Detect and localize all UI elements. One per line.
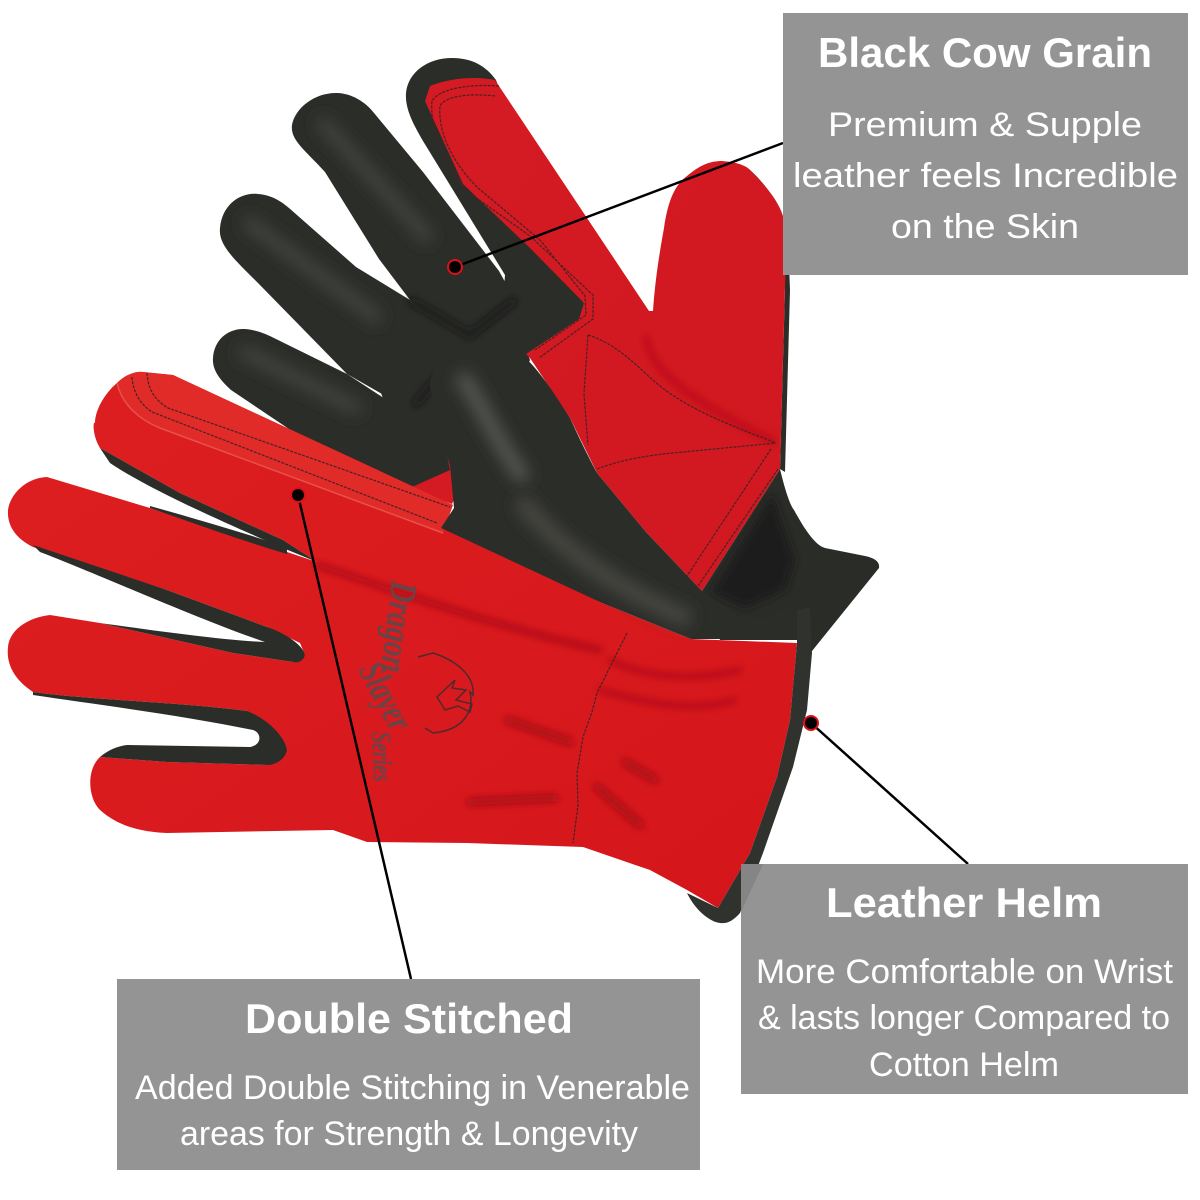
front glove: [8, 342, 812, 923]
black leather edge of index finger: [406, 58, 584, 356]
description: & lasts longer Compared to: [758, 999, 1170, 1037]
description: leather feels Incredible: [793, 157, 1178, 195]
thumb black edge: [749, 169, 790, 472]
description: [135, 1069, 690, 1153]
stitching on index finger and palm: [432, 86, 778, 586]
leather highlights and creases: [240, 120, 515, 410]
thumb highlights: [460, 375, 690, 620]
description: More Comfortable on Wrist: [756, 953, 1174, 991]
red suede index finger, thumb and palm: [425, 78, 786, 591]
small red palm sliver: [412, 445, 462, 504]
leader line: black cow grain: [447, 143, 783, 275]
fold shading on suede: [317, 565, 740, 825]
brand logo: Dragon: [372, 578, 425, 675]
base of fingers behind thumb: [380, 330, 530, 500]
description: Added Double Stitching in Venerable: [135, 1069, 690, 1107]
palm crease: [646, 335, 776, 443]
description: areas for Strength & Longevity: [180, 1115, 638, 1153]
leader line: leather helm: [803, 715, 968, 864]
glove body, red suede: [8, 372, 797, 908]
callout: leather helm: [741, 864, 1188, 1094]
description: Cotton Helm: [869, 1046, 1059, 1084]
middle finger, black leather: [292, 93, 520, 342]
description: [756, 953, 1174, 1084]
heading: Leather Helm: [826, 879, 1102, 926]
wrist shadow: [712, 495, 795, 608]
leader line: double stitched: [290, 487, 411, 979]
description: Premium & Supple: [828, 106, 1142, 144]
ring finger, black leather: [220, 194, 470, 410]
brand logo: Series: [365, 731, 398, 782]
black thumb: [430, 342, 797, 639]
dark finger edges: [33, 448, 317, 765]
back glove: [213, 58, 879, 651]
heading: Black Cow Grain: [818, 29, 1152, 76]
brand logo: [350, 578, 473, 782]
wrist, black leather: [702, 469, 879, 651]
leather helm: [687, 607, 812, 923]
brand logo: Slayer: [350, 655, 421, 739]
gathered wrist stitching: [573, 633, 627, 843]
little finger, black leather: [213, 329, 450, 487]
double-stitched flap: [117, 372, 453, 533]
description: on the Skin: [891, 208, 1079, 246]
description: [793, 106, 1178, 246]
callout: double stitched: [117, 979, 700, 1170]
heading: Double Stitched: [245, 995, 573, 1042]
callout: black cow grain: [783, 13, 1188, 275]
helm showing through panel corner: [741, 864, 763, 912]
